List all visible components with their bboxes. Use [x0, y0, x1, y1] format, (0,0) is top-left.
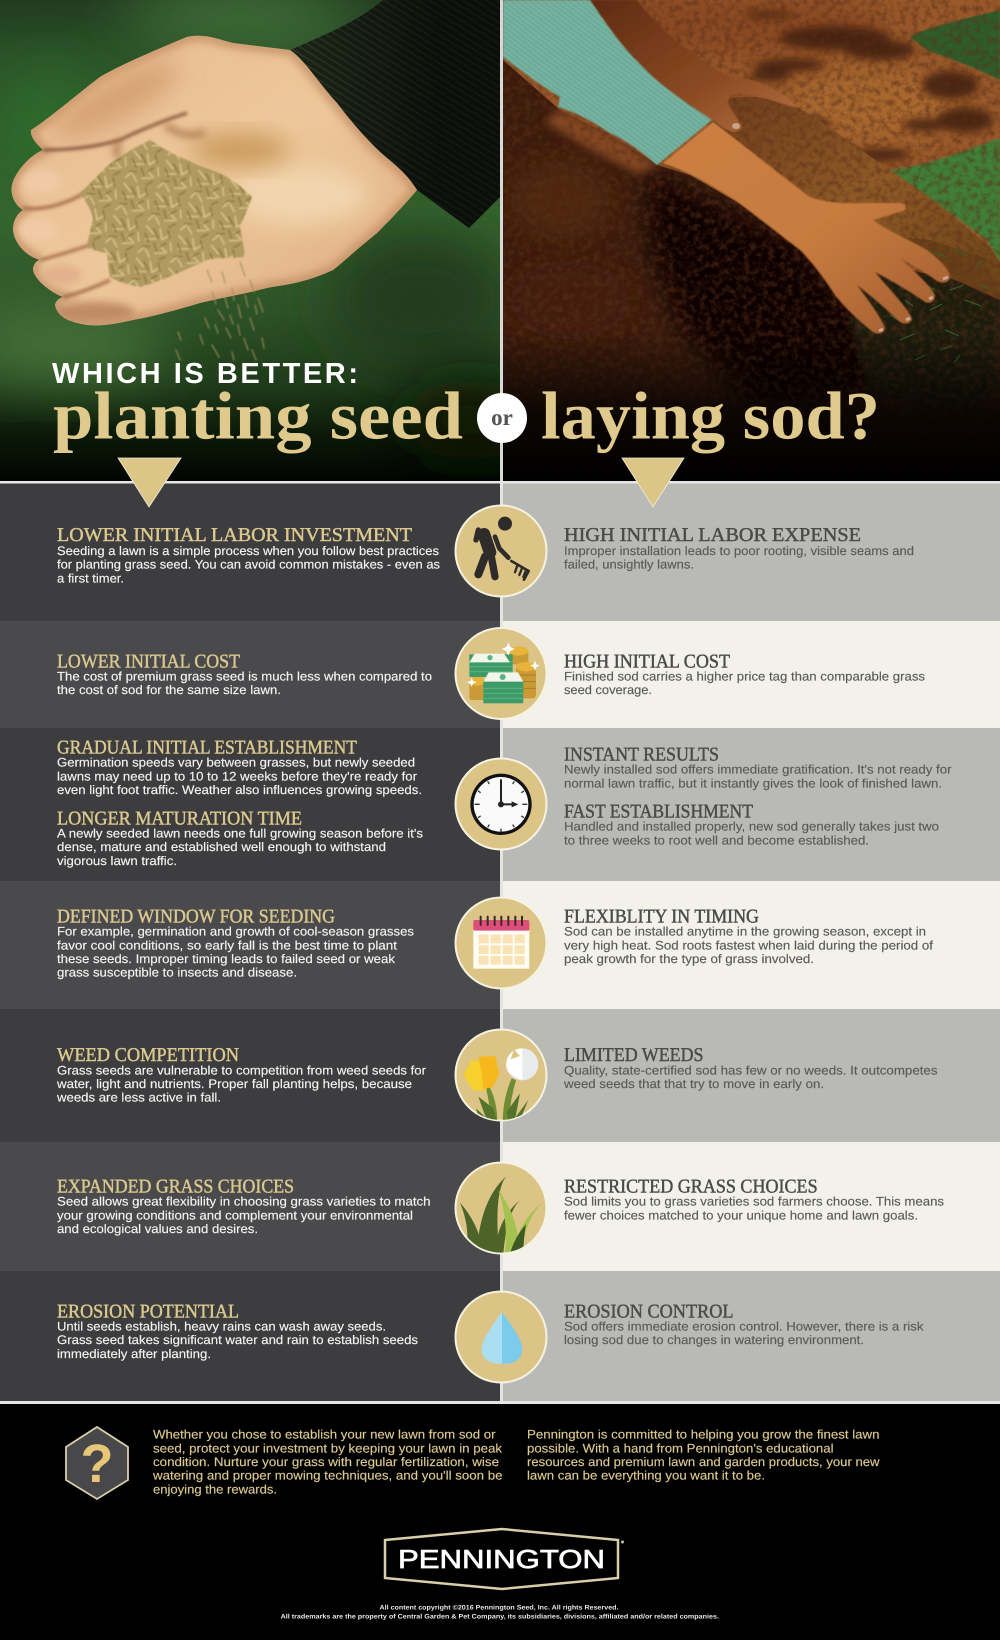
- row 3 seed text: even light foot traffic. Weather also influences growing speeds.: [57, 783, 422, 797]
- row 1 seed text: Seeding a lawn is a simple process when you follow best practices: [57, 544, 439, 558]
- row 3 sod text: to three weeks to root well and become established.: [564, 833, 869, 847]
- text: closing advice: seed, protect your investment by keeping your lawn in peak: [153, 1441, 503, 1455]
- row 4 seed text: these seeds. Improper timing leads to failed seed or weak: [57, 952, 396, 966]
- row 7 sod text: losing sod due to changes in watering environment.: [564, 1333, 864, 1347]
- row 1 seed text: a first timer.: [57, 571, 124, 585]
- row 5 sod text: [563, 1045, 938, 1091]
- row 6 sod text: fewer choices matched to your unique home and lawn goals.: [564, 1208, 918, 1222]
- row 6 seed text: Seed allows great flexibility in choosing grass varieties to match: [57, 1195, 431, 1209]
- row 7 sod text: Sod offers immediate erosion control. However, there is a risk: [564, 1319, 924, 1333]
- row 3 sod text: [564, 745, 952, 847]
- row 3 seed text: vigorous lawn traffic.: [57, 854, 177, 868]
- row 1 sod text: failed, unsightly lawns.: [564, 558, 694, 572]
- row 2 sod text: Finished sod carries a higher price tag than comparable grass: [564, 669, 925, 683]
- row 4 seed text: DEFINED WINDOW FOR SEEDING: [57, 906, 335, 927]
- photo detail: front grass patch: [890, 138, 1000, 262]
- row 7 seed text: Grass seed takes significant water and rain to establish seeds: [57, 1333, 418, 1347]
- row 4 seed text: favor cool conditions, so early fall is the best time to plant: [57, 938, 398, 952]
- photo detail: teal sleeve: [503, 0, 712, 165]
- row 7 seed text: EROSION POTENTIAL: [57, 1301, 239, 1322]
- text: closing advice: watering and proper mowing techniques, and you'll soon be: [152, 1469, 503, 1483]
- logo: Pennington: [385, 1529, 624, 1589]
- heading: planting seed: planting seed: [53, 378, 463, 454]
- text: Pennington commitment: Pennington is committed to helping you grow the finest lawn: [527, 1427, 880, 1441]
- row 3 seed text: Germination speeds vary between grasses, but newly seeded: [57, 756, 415, 770]
- row 3 sod text: FAST ESTABLISHMENT: [564, 802, 753, 823]
- photo detail: dark soil mound: [503, 60, 1000, 481]
- text: copyright: All trademarks are the property of Central Garden & Pet Company, its subsidiaries, divisions, affiliated and/or related companies.: [281, 1614, 719, 1620]
- row 5 seed text: water, light and nutrients. Proper fall planting helps, because: [56, 1077, 412, 1091]
- row 6 sod text: Sod limits you to grass varieties sod farmers choose. This means: [564, 1195, 944, 1209]
- row 2 seed text: LOWER INITIAL COST: [57, 652, 240, 673]
- icon: calendar: [456, 898, 546, 988]
- text: Pennington commitment: lawn can be everything you want it to be.: [527, 1469, 765, 1483]
- background divider in photo: [500, 0, 503, 481]
- photo detail: falling seeds: [176, 262, 264, 360]
- row 7 sod text: [564, 1301, 924, 1347]
- row 1 seed text: [57, 525, 440, 585]
- text: closing advice: [152, 1427, 503, 1497]
- row 5 seed text: weeds are less active in fall.: [56, 1091, 221, 1105]
- row 6 sod text: [564, 1176, 944, 1222]
- icon: grass blades: [456, 1162, 546, 1254]
- photo detail: grass seed pile: [80, 140, 252, 287]
- row 4 seed text: grass susceptible to insects and disease.: [57, 966, 297, 980]
- text: copyright: All content copyright ©2016 Pennington Seed, Inc. All rights Reserved.: [380, 1604, 619, 1612]
- photo detail: roll end with grass: [850, 235, 1000, 410]
- row 6 seed text: [57, 1176, 431, 1236]
- row 4 sod text: FLEXIBLITY IN TIMING: [564, 906, 759, 927]
- logo: Pennington: PENNINGTON: [398, 1544, 605, 1574]
- row 3 sod text: Handled and installed properly, new sod generally takes just two: [564, 820, 939, 834]
- text: closing advice: Whether you chose to establish your new lawn from sod or: [153, 1427, 496, 1441]
- row 5 seed text: Grass seeds are vulnerable to competition from weed seeds for: [57, 1063, 426, 1077]
- row 3 seed text: [57, 738, 423, 868]
- row 7 seed text: [57, 1301, 418, 1361]
- icon: flowers and weeds: [456, 1030, 546, 1120]
- photo detail: sod roll: [713, 97, 1000, 300]
- row 7 seed text: Until seeds establish, heavy rains can wash away seeds.: [57, 1319, 386, 1333]
- icon: worker with rake: [456, 506, 546, 596]
- arrow: sod column: [622, 458, 684, 507]
- row 3 sod text: INSTANT RESULTS: [564, 745, 719, 766]
- panel: laying sod photo: [503, 0, 1000, 482]
- row 5 sod text: Quality, state-certified sod has few or no weeds. It outcompetes: [564, 1063, 938, 1077]
- row 4 sod text: [564, 906, 934, 966]
- panel: planting seed photo: [0, 0, 540, 481]
- row 2 sod text: HIGH INITIAL COST: [564, 652, 730, 673]
- band backgrounds: [0, 481, 1000, 1640]
- row 1 sod text: HIGH INITIAL LABOR EXPENSE: [564, 525, 861, 546]
- photo detail: grass blades on roll end: [890, 250, 990, 363]
- row 3 seed text: GRADUAL INITIAL ESTABLISHMENT: [57, 738, 357, 759]
- icon: question mark hexagon: [66, 1427, 128, 1499]
- row 5 sod text: weed seeds that that try to move in early on.: [563, 1077, 824, 1091]
- heading: which is better: WHICH IS BETTER:: [52, 358, 358, 390]
- row 4 seed text: [57, 906, 414, 980]
- row 2 seed text: The cost of premium grass seed is much less when compared to: [57, 669, 432, 683]
- row 3 seed text: dense, mature and established well enough to withstand: [57, 840, 386, 854]
- text: closing advice: condition. Nurture your grass with regular fertilization, wise: [153, 1455, 499, 1469]
- row 5 sod text: LIMITED WEEDS: [564, 1045, 704, 1066]
- row 7 sod text: EROSION CONTROL: [564, 1301, 734, 1322]
- row 2 seed text: the cost of sod for the same size lawn.: [57, 683, 281, 697]
- row 1 seed text: for planting grass seed. You can avoid common mistakes - even as: [57, 558, 440, 572]
- row 3 seed text: lawns may need up to 10 to 12 weeks before they're ready for: [57, 769, 417, 783]
- arrow: seed column: [118, 458, 181, 507]
- row 4 sod text: peak growth for the type of grass involved.: [564, 952, 814, 966]
- row 1 sod text: Improper installation leads to poor rooting, visible seams and: [564, 544, 914, 558]
- text: Pennington commitment: possible. With a hand from Pennington's educational: [527, 1441, 834, 1455]
- row 1 seed text: LOWER INITIAL LABOR INVESTMENT: [57, 525, 412, 546]
- heading: laying sod: laying sod?: [541, 378, 880, 454]
- row 3 seed text: A newly seeded lawn needs one full growing season before it's: [57, 826, 423, 840]
- photo detail: back grass patch: [910, 10, 1000, 80]
- row 4 sod text: Sod can be installed anytime in the growing season, except in: [564, 925, 926, 939]
- icon: water drop: [456, 1292, 546, 1382]
- row 7 seed text: immediately after planting.: [57, 1347, 211, 1361]
- row 5 seed text: [56, 1045, 426, 1105]
- text: Pennington commitment: [527, 1427, 880, 1483]
- photo detail: knit sleeve: [290, 0, 500, 228]
- row 6 seed text: your growing conditions and complement your environmental: [57, 1208, 413, 1222]
- row 6 seed text: EXPANDED GRASS CHOICES: [57, 1176, 294, 1197]
- row 2 sod text: seed coverage.: [564, 683, 652, 697]
- text: Pennington commitment: resources and premium lawn and garden products, your new: [527, 1455, 880, 1469]
- badge: or: or: [491, 405, 513, 430]
- text: copyright: [281, 1604, 719, 1620]
- icon: money and coins: [456, 628, 546, 719]
- row 3 seed text: LONGER MATURATION TIME: [57, 808, 302, 829]
- row 6 sod text: RESTRICTED GRASS CHOICES: [564, 1176, 818, 1197]
- row 6 seed text: and ecological values and desires.: [57, 1222, 258, 1236]
- row 3 sod text: Newly installed sod offers immediate gratification. It's not ready for: [564, 763, 952, 777]
- photo detail: soil clumps: [745, 12, 993, 161]
- icon: question mark hexagon: ?: [80, 1434, 114, 1494]
- icon: clock: [456, 758, 546, 850]
- row 2 seed text: [57, 652, 432, 697]
- photo detail: front arm and hand: [663, 122, 950, 334]
- badge: or: [477, 393, 527, 443]
- row 2 sod text: [564, 652, 925, 697]
- row 5 seed text: WEED COMPETITION: [57, 1045, 239, 1066]
- photo detail: shadow hollow: [648, 172, 880, 410]
- row 4 sod text: very high heat. Sod roots fastest when laid during the period of: [564, 938, 934, 952]
- photo detail: hand holding seed: [0, 30, 430, 330]
- row 1 sod text: [564, 525, 914, 572]
- row 4 seed text: For example, germination and growth of cool-season grasses: [57, 925, 414, 939]
- row 3 sod text: normal lawn traffic, but it instantly gives the look of finished lawn.: [564, 776, 942, 790]
- text: closing advice: enjoying the rewards.: [153, 1483, 277, 1497]
- photo detail: back arm: [590, 0, 797, 132]
